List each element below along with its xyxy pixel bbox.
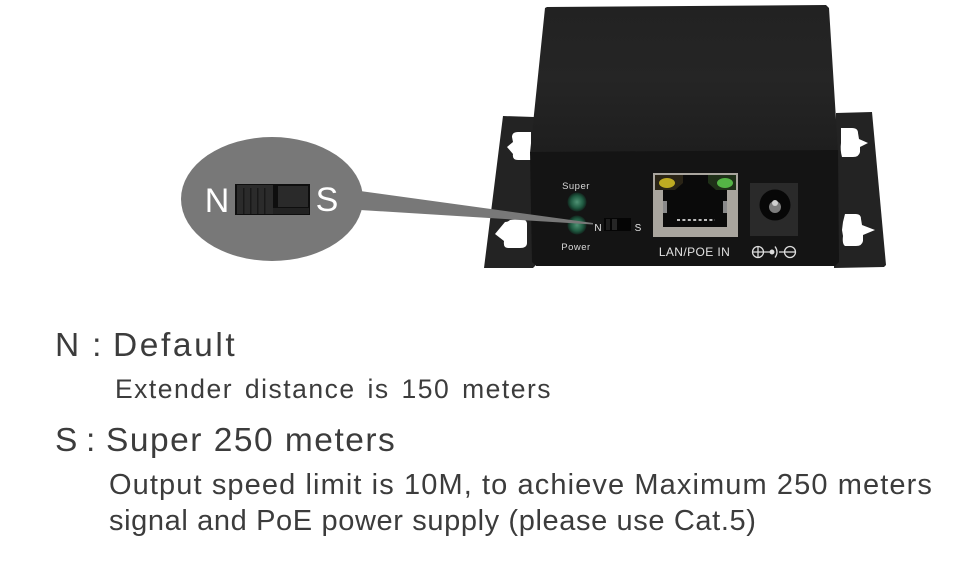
callout pointer — [360, 191, 593, 224]
LED: Power — [568, 216, 586, 234]
polarity symbol — [752, 246, 796, 258]
heading: S Super 250 meters: : — [86, 422, 97, 459]
device: PoE extender — [484, 5, 886, 268]
label: LAN/POE IN: LAN/POE IN — [659, 245, 730, 259]
text: output speed line 2: signal and PoE power supply (please use Cat.5) — [109, 505, 757, 537]
label: S: S — [635, 223, 642, 234]
DC power jack — [750, 183, 798, 236]
heading: S Super 250 meters: Super 250 meters — [106, 422, 396, 459]
right mounting flange — [834, 112, 886, 268]
label: Super: Super — [562, 181, 590, 192]
label: N: N — [594, 223, 602, 234]
heading: N Default: Default — [113, 327, 237, 364]
heading: S Super 250 meters: S — [55, 422, 79, 459]
heading: N Default: N : — [55, 327, 103, 364]
text: output speed line 1: Output speed limit is 10M, to achieve Maximum 250 meters — [109, 469, 933, 501]
callout ellipse — [181, 137, 363, 261]
device front panel — [530, 150, 839, 266]
left mounting flange — [484, 116, 535, 268]
text: extender distance: Extender distance is 150 meters — [115, 374, 552, 404]
switch letter N: N — [205, 182, 229, 220]
label: Power: Power — [561, 242, 591, 253]
switch letter S: S — [316, 181, 338, 219]
callout: magnified switch — [181, 137, 593, 261]
LED: yellow — [659, 178, 675, 188]
small switch — [604, 218, 631, 231]
magnified switch — [235, 184, 310, 215]
device top cover — [530, 5, 838, 153]
LED: Super — [568, 192, 586, 212]
RJ45 port — [653, 173, 738, 237]
LED: green — [717, 178, 733, 188]
